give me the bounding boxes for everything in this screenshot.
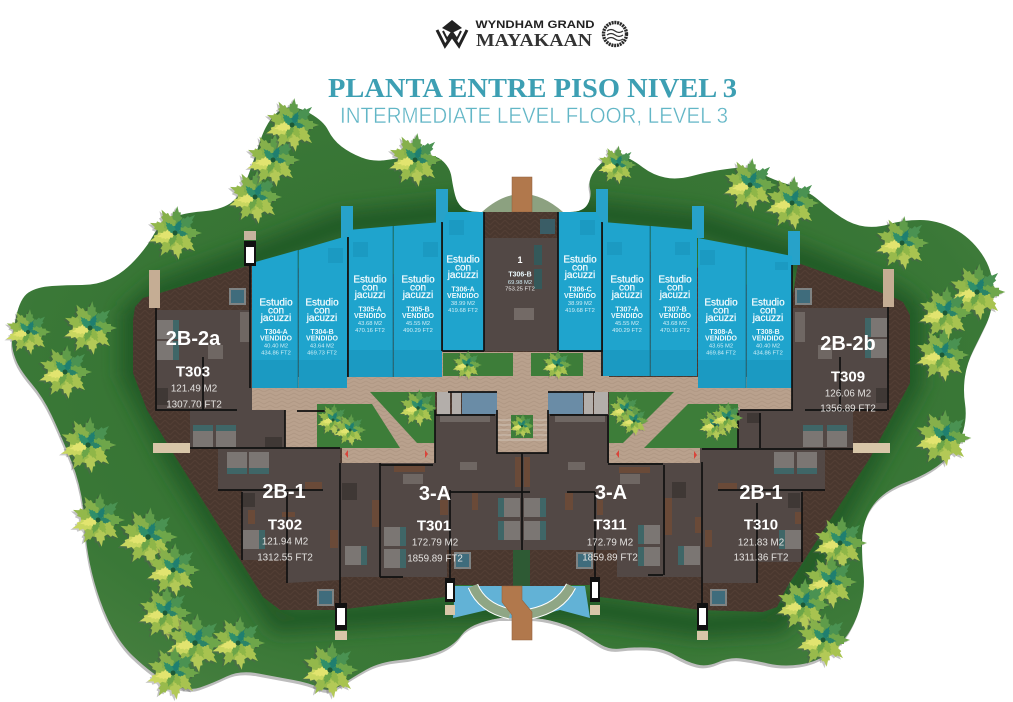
unit: T305-B: jacuzzi <box>402 290 433 301</box>
unit: T306-B: 69.98 M2 <box>508 280 532 286</box>
blue unit dividers <box>298 226 746 388</box>
gardens <box>317 353 738 448</box>
unit: T304-B: Estudio <box>305 298 339 308</box>
unit: T305-A: 470.16 FT2 <box>355 328 385 334</box>
unit: T304-B: con <box>314 306 330 316</box>
unit: T308-B: 434.86 FT2 <box>753 350 783 356</box>
label: T303: 121.49 M2 <box>171 384 217 394</box>
label: T303: T303 <box>176 364 210 380</box>
label: T301 <box>407 483 463 564</box>
unit: T308-A <box>698 238 746 388</box>
unit: T306-C: VENDIDO <box>564 293 596 300</box>
unit: T307-B: jacuzzi <box>659 290 690 301</box>
unit: T308-B <box>747 247 792 388</box>
unit: T304-A: 434.86 FT2 <box>261 350 291 356</box>
unit: T306-A <box>443 212 484 351</box>
unit: T305-B: 45.55 M2 <box>406 321 430 327</box>
label: T309 <box>820 333 876 414</box>
unit: T305-A: Estudio <box>353 274 387 286</box>
label: T309: 2B-2b <box>820 333 876 355</box>
wooden deck <box>133 212 910 612</box>
label: T301: 3-A <box>419 483 451 505</box>
unit: T304-A: 40.40 M2 <box>264 344 288 350</box>
label: T311: T311 <box>593 516 627 534</box>
unit: T304-A: jacuzzi <box>260 313 291 324</box>
unit: T305-A: con <box>362 282 378 294</box>
unit: T305-A: T305-A <box>358 306 382 314</box>
unit: T305-B <box>394 222 442 377</box>
pool and bridge at the bottom <box>453 586 590 640</box>
unit: T308-B: 40.40 M2 <box>756 344 780 350</box>
unit: T308-A: con <box>713 306 729 316</box>
label: T301: 172.79 M2 <box>412 538 458 548</box>
walkways <box>252 352 792 463</box>
label: T311 <box>582 482 638 564</box>
unit: T307-A: T307-A <box>615 306 639 314</box>
walls <box>156 212 888 603</box>
unit: T308-B: VENDIDO <box>752 336 784 342</box>
furniture: beds and jacuzzis <box>157 288 887 606</box>
unit: T304-B: 43.64 M2 <box>310 344 334 350</box>
unit: T308-A: 43.65 M2 <box>709 344 733 350</box>
unit: T305-B: 490.29 FT2 <box>403 328 433 334</box>
unit: T308-A: jacuzzi <box>705 313 736 324</box>
unit: T305-A <box>348 226 393 377</box>
unit: T308-A: Estudio <box>704 298 738 308</box>
label: T302: 1312.55 FT2 <box>257 552 313 564</box>
label: T302: 2B-1 <box>262 481 306 503</box>
label: T310: 121.83 M2 <box>738 538 784 548</box>
label: T311: 3-A <box>595 482 627 504</box>
unit: T305-B: Estudio <box>401 274 435 286</box>
unit: T304-A: T304-A <box>264 329 288 336</box>
entry towers and tan caps <box>149 231 894 640</box>
red direction arrows <box>345 450 697 459</box>
unit: T306-A: VENDIDO <box>447 293 479 300</box>
unit: T306-A: jacuzzi <box>447 270 478 281</box>
label: T311: 1859.89 FT2 <box>582 552 638 564</box>
label: T302 <box>257 481 313 564</box>
interior floors <box>157 308 888 583</box>
stairs and small rooms <box>437 392 608 440</box>
unit: T307-B: 470.16 FT2 <box>660 328 690 334</box>
unit: T306-C: con <box>572 262 588 274</box>
label: T303: 1307.70 FT2 <box>166 400 222 410</box>
unit: T304-A: VENDIDO <box>260 336 292 342</box>
logo: Wyndham Grand Mayakaan: WYNDHAM GRAND <box>476 19 595 31</box>
unit: T306-A: 419.68 FT2 <box>448 308 478 314</box>
unit: T304-A: Estudio <box>259 298 293 308</box>
unit: T306-A: con <box>455 262 471 274</box>
unit: T307-B <box>651 226 697 376</box>
unit: T304-B <box>299 236 347 388</box>
unit: T306-C: 38.99 M2 <box>568 301 592 307</box>
unit: T307-B: con <box>667 282 683 294</box>
logo: Wyndham Grand Mayakaan <box>437 19 626 50</box>
unit: T304-A: con <box>268 306 284 316</box>
label: T310 <box>734 482 788 564</box>
unit: T308-A: T308-A <box>709 329 733 336</box>
unit: T308-A: 469.84 FT2 <box>706 350 736 356</box>
logo: Wyndham Grand Mayakaan: MAYAKAAN <box>476 30 592 50</box>
unit: T305-A: VENDIDO <box>354 313 386 320</box>
towers of the blue studios <box>341 189 800 265</box>
label: T310: 2B-1 <box>739 482 783 504</box>
label: T311: 172.79 M2 <box>587 538 633 548</box>
unit: T305-B: VENDIDO <box>402 313 434 320</box>
unit: T306-B <box>484 212 558 351</box>
unit: T307-B: Estudio <box>658 274 692 286</box>
unit: T307-A: 490.29 FT2 <box>612 328 642 334</box>
unit: T308-B: con <box>760 306 776 316</box>
unit: T306-C: 419.68 FT2 <box>565 308 595 314</box>
unit: T307-A: con <box>619 282 635 294</box>
unit: T306-C: Estudio <box>563 254 597 266</box>
subtitle: INTERMEDIATE LEVEL FLOOR, LEVEL 3 <box>340 103 728 128</box>
label: T309: 126.06 M2 <box>825 388 871 400</box>
label: T309: 1356.89 FT2 <box>820 404 876 414</box>
unit: T308-A: VENDIDO <box>705 336 737 342</box>
label: T302: 121.94 M2 <box>262 536 308 548</box>
unit: T306-A: 38.99 M2 <box>451 301 475 307</box>
unit: T308-B: Estudio <box>751 298 785 308</box>
unit: T304-B: jacuzzi <box>306 313 337 324</box>
unit: T307-A: Estudio <box>610 274 644 286</box>
unit: T306-C: jacuzzi <box>564 270 595 281</box>
unit: T304-B: T304-B <box>310 329 334 336</box>
unit: T307-A <box>603 222 650 376</box>
label: T302: T302 <box>268 516 302 534</box>
unit: T305-A: jacuzzi <box>354 290 385 301</box>
unit: T304-A <box>252 250 298 388</box>
label: T301: T301 <box>417 518 451 534</box>
unit: T307-A: jacuzzi <box>611 290 642 301</box>
unit: T306-C <box>558 212 602 351</box>
unit: T306-C: T306-C <box>568 286 592 294</box>
unit: T307-A: VENDIDO <box>611 313 643 320</box>
unit: T306-B: T306-B <box>508 272 532 278</box>
unit: T306-B: 1 <box>517 255 523 265</box>
unit: T306-A: Estudio <box>446 254 480 266</box>
unit: T305-B: T305-B <box>406 306 430 314</box>
unit: T305-A: 43.68 M2 <box>358 321 382 327</box>
label: T301: 1859.89 FT2 <box>407 554 463 564</box>
unit: T304-B: VENDIDO <box>306 336 338 342</box>
unit: T307-B: 43.68 M2 <box>663 321 687 327</box>
unit: T305-B: con <box>410 282 426 294</box>
title: PLANTA ENTRE PISO NIVEL 3 <box>328 72 737 103</box>
label: T309: T309 <box>831 368 865 386</box>
label: T310: 1311.36 FT2 <box>734 552 788 564</box>
label: T310: T310 <box>744 516 778 534</box>
unit: T307-A: 45.55 M2 <box>615 321 639 327</box>
unit: T307-B: T307-B <box>663 306 687 314</box>
center top arch garden <box>482 194 563 212</box>
unit: T308-B: jacuzzi <box>752 313 783 324</box>
unit: T306-A: T306-A <box>451 286 475 294</box>
wooden dock top <box>512 177 532 212</box>
label: T303 <box>166 328 222 410</box>
unit: T306-B: 753.25 FT2 <box>505 286 535 292</box>
unit: T307-B: VENDIDO <box>659 313 691 320</box>
label: T303: 2B-2a <box>166 328 221 350</box>
unit: T308-B: T308-B <box>756 329 780 336</box>
unit: T304-B: 469.73 FT2 <box>307 350 337 356</box>
